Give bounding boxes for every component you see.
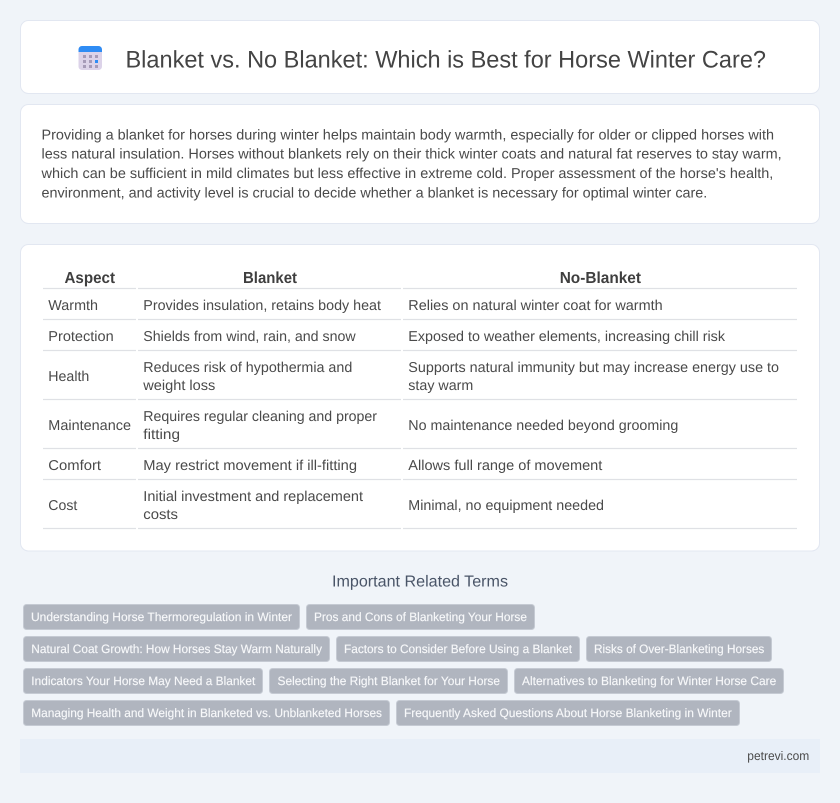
- tag: Pros and Cons of Blanketing Your Horse: [314, 610, 527, 624]
- table row: cost: Cost: [48, 498, 77, 514]
- tag list: related terms: [24, 604, 784, 726]
- text block: introduction paragraph: Providing a blanket for horses during winter helps maintain body warmth, especially for older or clipped horses with: [42, 127, 774, 143]
- table row: health: [48, 360, 779, 394]
- tag: [306, 604, 534, 630]
- tag: Indicators Your Horse May Need a Blanket: [31, 674, 256, 688]
- table header row: No-Blanket: [560, 270, 642, 287]
- table row: comfort: Comfort: [48, 458, 101, 474]
- tag: Alternatives to Blanketing for Winter Horse Care: [522, 674, 777, 688]
- heading: important related terms: Important Related Terms: [332, 574, 508, 591]
- table row: maintenance: Maintenance: [48, 418, 131, 434]
- table header row: [64, 270, 642, 287]
- table row: maintenance: fitting: [143, 427, 180, 443]
- tag: Natural Coat Growth: How Horses Stay Warm Naturally: [31, 642, 323, 656]
- tag: Frequently Asked Questions About Horse Blanketing in Winter: [404, 706, 732, 720]
- table header row: Blanket: [243, 270, 298, 287]
- icon: calendar: [78, 46, 102, 70]
- tag: [24, 636, 330, 662]
- table row: health: Reduces risk of hypothermia and: [143, 360, 352, 376]
- table row: warmth: Provides insulation, retains body heat: [143, 298, 381, 314]
- tag: Understanding Horse Thermoregulation in Winter: [31, 610, 292, 624]
- footer source text: petrevi.com: [747, 749, 809, 763]
- table row: health: Supports natural immunity but may increase energy use to: [408, 360, 779, 376]
- table row: health: Health: [48, 369, 89, 385]
- tag: [270, 668, 508, 694]
- table row: cost: Initial investment and replacement: [143, 489, 363, 505]
- table row: cost: costs: [143, 507, 178, 523]
- text block: introduction paragraph: which can be sufficient in mild climates but less effective in extreme cold. Proper assessment of the horse's health,: [40, 166, 773, 182]
- table row: protection: Protection: [48, 329, 114, 345]
- table row: maintenance: Requires regular cleaning and proper: [143, 409, 377, 425]
- text block: introduction paragraph: environment, and activity level is crucial to decide whether a blanket is necessary for optimal winter care.: [42, 185, 707, 201]
- title: Blanket vs. No Blanket: Which is Best for Horse Winter Care?: [126, 46, 766, 73]
- table row: protection: Shields from wind, rain, and snow: [143, 329, 356, 345]
- tag: Selecting the Right Blanket for Your Horse: [278, 674, 500, 688]
- tag: [24, 700, 390, 726]
- text block: introduction paragraph: [40, 127, 782, 201]
- tag: [396, 700, 740, 726]
- table row: comfort: [48, 458, 602, 474]
- panel: comparison table: [20, 244, 820, 551]
- table row: warmth: [48, 298, 663, 314]
- footer: [20, 739, 820, 773]
- tag: [24, 604, 300, 630]
- table row: warmth: Warmth: [48, 298, 98, 314]
- panel: header: [20, 20, 820, 94]
- table row: cost: Minimal, no equipment needed: [408, 498, 604, 514]
- table row: protection: Exposed to weather elements, increasing chill risk: [408, 329, 726, 345]
- table row: maintenance: No maintenance needed beyond grooming: [408, 418, 678, 434]
- table row: comfort: Allows full range of movement: [408, 458, 602, 474]
- tag: [24, 668, 262, 694]
- table row: warmth: Relies on natural winter coat for warmth: [408, 298, 663, 314]
- tag: [514, 668, 784, 694]
- table row: maintenance: [48, 409, 678, 443]
- tag: Risks of Over-Blanketing Horses: [594, 642, 764, 656]
- panel: introduction: [20, 104, 820, 224]
- tag: Factors to Consider Before Using a Blanket: [344, 642, 573, 656]
- table row: protection: [48, 329, 726, 345]
- table row: health: stay warm: [408, 378, 473, 394]
- table row: cost: [48, 489, 604, 523]
- tag: Managing Health and Weight in Blanketed vs. Unblanketed Horses: [31, 706, 382, 720]
- table row: health: weight loss: [142, 378, 215, 394]
- text block: introduction paragraph: less natural insulation. Horses without blankets rely on their thick winter coats and natural fat reserves to stay warm,: [42, 146, 782, 162]
- tag: [336, 636, 580, 662]
- table header row: Aspect: [64, 270, 116, 287]
- tag: [586, 636, 772, 662]
- table row: comfort: May restrict movement if ill-fitting: [143, 458, 357, 474]
